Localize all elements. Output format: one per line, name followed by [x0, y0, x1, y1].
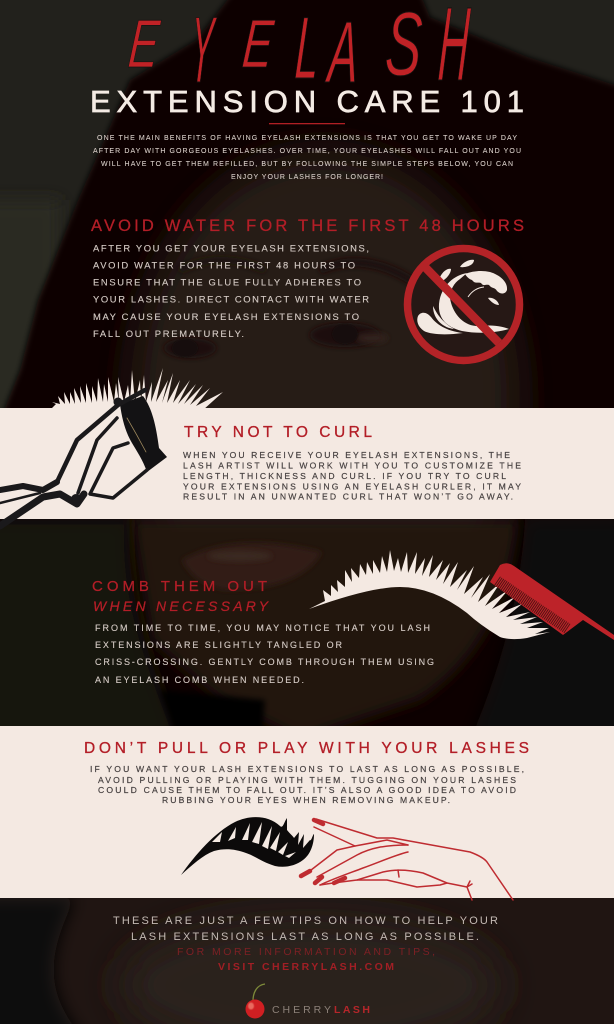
logo: cherrylash: CHERRY: [272, 1004, 331, 1016]
text: comb them out: FROM TIME TO TIME, YOU MAY NOTICE THAT YOU LASH: [95, 623, 430, 633]
logo: cherrylash: [246, 984, 370, 1018]
intro text: ONE THE MAIN BENEFITS OF HAVING EYELASH EXTENSIONS IS THAT YOU GET TO WAKE UP DAY: [97, 135, 517, 142]
text: call to action: VISIT CHERRYLASH.COM: [218, 961, 394, 973]
text: comb them out: AN EYELASH COMB WHEN NEEDED.: [95, 675, 304, 685]
text: try not to curl: [183, 450, 521, 502]
text: avoid water: [93, 242, 369, 339]
text: call to action: [177, 946, 435, 973]
text: comb them out: EXTENSIONS ARE SLIGHTLY TANGLED OR: [95, 640, 342, 650]
heading: comb them out: [92, 578, 270, 614]
text: try not to curl: WHEN YOU RECEIVE YOUR EYELASH EXTENSIONS, THE: [183, 450, 510, 460]
title: EYELASH script: A: [323, 3, 361, 101]
title: EXTENSION CARE 101: EXTENSION CARE 101: [90, 84, 524, 119]
text: don't pull: AVOID PULLING OR PLAYING WITH THEM. TUGGING ON YOUR LASHES: [98, 775, 516, 785]
icon: white lash behind curler: [50, 368, 223, 410]
heading: avoid water: AVOID WATER FOR THE FIRST 48 HOURS: [91, 217, 524, 235]
text: try not to curl: RESULT IN AN UNWANTED CURL THAT WON’T GO AWAY.: [183, 492, 513, 502]
title: EYELASH script: L: [293, 0, 322, 97]
icon: eyelash curler: [0, 390, 167, 526]
text: don't pull: IF YOU WANT YOUR LASH EXTENSIONS TO LAST AS LONG AS POSSIBLE,: [90, 764, 524, 774]
text: avoid water: FALL OUT PREMATURELY.: [93, 328, 244, 339]
text: try not to curl: YOUR EXTENSIONS USING AN EYELASH CURLER, IT MAY: [183, 482, 521, 492]
text: don't pull: RUBBING YOUR EYES WHEN REMOVING MAKEUP.: [162, 795, 450, 805]
text: avoid water: AVOID WATER FOR THE FIRST 48 HOURS TO: [93, 260, 355, 270]
text: don't pull: [90, 764, 524, 805]
intro text: ENJOY YOUR LASHES FOR LONGER!: [231, 174, 383, 181]
icon: white lash with comb: [309, 550, 614, 640]
heading: try not to curl: TRY NOT TO CURL: [184, 424, 372, 441]
text: avoid water: MAY CAUSE YOUR EYELASH EXTENSIONS TO: [93, 311, 359, 322]
text: don't pull: COULD CAUSE THEM TO FALL OUT. IT’S ALSO A GOOD IDEA TO AVOID: [98, 785, 516, 795]
title: EYELASH script: [126, 0, 473, 102]
title: EYELASH script: Y: [188, 0, 218, 102]
text: call to action: FOR MORE INFORMATION AND TIPS,: [177, 946, 435, 958]
intro text: WILL HAVE TO GET THEM REFILLED, BUT BY FOLLOWING THE SIMPLE STEPS BELOW, YOU CAN: [101, 161, 513, 168]
heading: comb them out: COMB THEM OUT: [92, 578, 267, 595]
panel: don't pull or play: [0, 726, 614, 900]
text: avoid water: AFTER YOU GET YOUR EYELASH EXTENSIONS,: [93, 242, 369, 254]
text: avoid water: ENSURE THAT THE GLUE FULLY ADHERES TO: [93, 276, 361, 288]
icon: cherry: [246, 984, 265, 1018]
icon: black lash: [181, 817, 314, 875]
text: closing: LASH EXTENSIONS LAST AS LONG AS POSSIBLE.: [131, 931, 479, 943]
icon: no water: [408, 248, 520, 360]
text: closing: [113, 915, 498, 943]
intro text: AFTER DAY WITH GORGEOUS EYELASHES. OVER TIME, YOUR EYELASHES WILL FALL OUT AND YOU: [93, 148, 521, 155]
text: closing: THESE ARE JUST A FEW TIPS ON HOW TO HELP YOUR: [113, 915, 498, 927]
text: comb them out: [95, 623, 434, 685]
title: EYELASH script: E: [126, 7, 163, 82]
logo: cherrylash: LASH: [334, 1004, 370, 1016]
intro text: [93, 135, 521, 181]
text: try not to curl: LASH ARTIST WILL WORK WITH YOU TO CUSTOMIZE THE: [183, 460, 521, 470]
heading: don't pull: DON’T PULL OR PLAY WITH YOUR LASHES: [84, 740, 529, 757]
text: avoid water: YOUR LASHES. DIRECT CONTACT WITH WATER: [93, 294, 369, 304]
heading: comb them out: WHEN NECESSARY: [93, 598, 270, 614]
text: try not to curl: LENGTH, THICKNESS AND CURL. IF YOU TRY TO CURL: [183, 471, 506, 481]
divider: [269, 123, 345, 124]
panel: try not to curl: [0, 408, 614, 519]
icon: red hand: [301, 819, 513, 900]
icon: red comb: [490, 563, 614, 640]
title: EYELASH script: E: [240, 7, 277, 82]
text: comb them out: CRISS-CROSSING. GENTLY COMB THROUGH THEM USING: [95, 657, 434, 667]
